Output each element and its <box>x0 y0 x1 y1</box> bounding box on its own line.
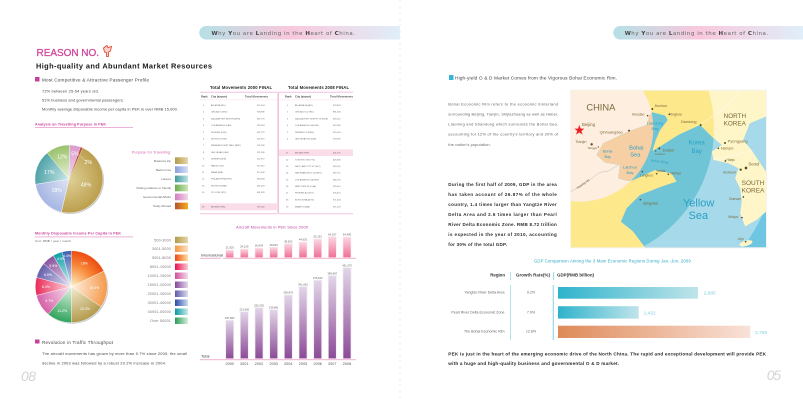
pie chart: travelling purpose: 17% <box>44 170 55 176</box>
text block: Bohai Economic Rim: the nation's population. <box>448 142 491 147</box>
section: passenger profile: 72% between 25-54 years old. <box>42 88 99 94</box>
table: total movements 2008 <box>279 85 354 214</box>
section: passenger profile: 51% business and governmental passengers. <box>42 98 124 102</box>
table: total movements 2000: 517,440 <box>257 172 265 174</box>
table: total movements 2008: LOS ANGELES CA (LAX) <box>295 124 319 127</box>
table: total movements 2000: 481,628 <box>257 192 265 194</box>
map: Bohai economic rim: CHINA <box>586 102 616 112</box>
table: total movements 2008: BOSTON MA (BOS) <box>295 198 314 201</box>
bar chart: total movements: 187,682 <box>225 316 235 320</box>
table: total movements 2008: SAN FRANCISCO CA (SFO) <box>295 172 322 175</box>
bar chart: total movements: 236,891 <box>269 305 279 309</box>
legend: travelling purpose: Governmental Affairs <box>143 195 171 199</box>
bar chart: total movements: 2008 <box>343 362 351 366</box>
map: Bohai economic rim: Seoul <box>748 161 759 166</box>
bar chart: international movements <box>200 232 356 259</box>
chart heading: disposable income: Monthly Disposable Income Per Capita in PEK <box>35 232 121 236</box>
table chart: GDP comparison: 9.2% <box>527 290 536 294</box>
chart title: GDP comparison: GDP Comparison Among the 3 Main Economic Regions During Jan.-Jun. 2009 <box>534 258 691 263</box>
table chart: GDP comparison: 1,422 <box>644 310 656 316</box>
table: total movements 2000: ST LOUIS (STL) <box>211 192 227 194</box>
bar chart: total movements: 399,987 <box>327 271 338 275</box>
table: total movements 2008: 29 <box>286 206 289 208</box>
text block: GDP statement: is expected in the year of 2010, accounting <box>448 232 557 237</box>
text block: Bohai Economic Rim: Liaoning and Shandong which surrounds the Bohai Sea, <box>448 122 558 127</box>
table: total movements 2008: DALLAS/FORT WORTH TX (DFW) <box>295 117 328 120</box>
chart title: aircraft movements: Aircraft Movements in PEK Since 2000 <box>236 224 309 230</box>
table: total movements 2000: BEIJING (PEK) <box>211 206 226 208</box>
table: total movements 2000: 3 <box>203 118 205 120</box>
table: total movements 2000: 908,989 <box>257 112 265 114</box>
title: reason number: REASON NO. <box>36 48 99 59</box>
bar chart: total movements: 2005 <box>299 362 307 366</box>
pie chart: disposable income: 9.7% <box>45 299 53 303</box>
bar chart: international movements: 28,033 <box>270 243 278 247</box>
table: total movements 2000: 11 <box>202 172 205 174</box>
table: total movements 2008: 22 <box>286 160 289 162</box>
table: total movements 2000: 98 <box>202 206 205 208</box>
pie chart: travelling purpose: 18% <box>52 188 62 194</box>
table: total movements 2000: PARIS (CDG) <box>211 164 224 167</box>
legend: travelling purpose: Purpose for Travelling: <box>132 150 171 154</box>
section heading: O & D market: High-yield O & D Market Comes from the Vigorous Bohai Economic Rim. <box>455 76 617 82</box>
page divider <box>399 0 401 400</box>
map: Bohai economic rim: Beijing <box>582 122 596 127</box>
table chart: GDP comparison: Growth Rate(%) <box>516 272 551 277</box>
table: total movements 2008: TORONTO ON (YYZ) <box>295 160 315 162</box>
table: total movements 2008: 2 <box>287 112 289 114</box>
map: Bohai economic rim: Bay <box>692 149 702 155</box>
table: total movements 2008: Total Movements <box>330 94 354 98</box>
map: Bohai economic rim: Bay <box>627 170 633 175</box>
pie chart: disposable income: 8.4% <box>42 285 50 289</box>
table chart: GDP comparison: GDP(RMB billion) <box>557 272 595 277</box>
text block: PEK conclusion: with a huge and high-quality business and governmental O & D market. <box>447 361 619 366</box>
text block: GDP statement <box>448 182 557 247</box>
table: total movements 2000: 522,972 <box>257 159 265 161</box>
section: passenger profile: Monthly average disposable income per capita in PEK is over RMB 15,000. <box>42 106 178 112</box>
bar chart: total movements: 256,235 <box>254 303 264 307</box>
bar chart: total movements: 431,670 <box>342 263 352 267</box>
table: total movements 2000: PHILADELPHIA (PHL) <box>211 178 232 181</box>
map: Bohai economic rim: Dandong <box>681 120 697 124</box>
text block: Bohai Economic Rim: Bohai Economic Rim refers to the economic hinterland <box>448 102 558 107</box>
pie chart: travelling purpose: 2% <box>85 160 92 166</box>
map: Bohai economic rim: Korea <box>689 141 705 147</box>
table: total movements 2008: 656,310 <box>333 118 341 120</box>
bar chart: international movements: 44,620 <box>299 238 308 242</box>
table: total movements 2008: 622,506 <box>333 125 341 127</box>
text block: Bohai Economic Rim: surrounding Beijing, Tianjin, Shijiazhuang as well as Hebei, <box>448 112 558 116</box>
text block: GDP statement: country, 1.4 times larger than Yangtze River <box>448 202 557 207</box>
table: total movements 2000: 12 <box>202 179 205 181</box>
map: Bohai economic rim: Bay <box>605 155 611 159</box>
table: total movements 2008: LAS VEGAS NV (LAS) <box>295 138 316 140</box>
table: total movements 2000: MINNEAPOLIS/ST PAUL (MSP) <box>211 144 241 147</box>
map: Bohai economic rim: SOUTH <box>742 180 765 187</box>
pie chart: travelling purpose <box>35 145 104 214</box>
table: total movements 2008: ATLANTA GA (ATL) <box>295 104 313 107</box>
map: Bohai economic rim: KOREA <box>742 188 765 195</box>
table: total movements 2000: LOS ANGELES (LAX) <box>211 124 232 127</box>
table: total movements 2000: 13 <box>202 185 205 187</box>
table: total movements 2008: 376,414 <box>333 186 341 188</box>
table: total movements 2000: Total Movements <box>245 94 268 98</box>
legend: disposable income: 3001-5000 <box>152 247 171 251</box>
text block: GDP statement: for 30% of the total GDP. <box>448 242 507 247</box>
table: total movements 2008: 578,949 <box>333 138 341 140</box>
header band: left page <box>199 26 400 40</box>
table chart: GDP comparison: 12.8% <box>526 330 537 334</box>
text block: GDP statement: Delta Area and 2.6 times larger than Pearl <box>448 212 557 217</box>
legend: disposable income: Over 50001 <box>150 319 171 323</box>
table: total movements 2000: MIAMI (MIA) <box>211 171 223 174</box>
table chart: GDP comparison: Pearl River Delta Economic Zone <box>451 310 504 314</box>
legend: travelling purpose: Business trip <box>154 159 171 163</box>
table: total movements 2000: 187,682 <box>257 206 265 208</box>
map: Bohai economic rim: KOREA <box>724 121 747 128</box>
map: Bohai economic rim <box>570 90 767 248</box>
bar chart: total movements: 2003 <box>269 362 278 366</box>
table: total movements 2008: 428,586 <box>333 160 341 162</box>
table: total movements 2008: 369,501 <box>333 166 341 168</box>
table: total movements 2000 <box>200 85 279 214</box>
legend: disposable income: 30001-40000 <box>148 301 171 305</box>
map: Bohai economic rim: Tanggu <box>587 146 597 150</box>
section: passenger profile: Most Competitive & Attractive Passenger Profile <box>42 78 149 82</box>
map: Bohai economic rim: Longkou <box>640 174 653 178</box>
map: Bohai economic rim: Qingdao <box>643 201 659 206</box>
map: Bohai economic rim: Sea <box>689 210 709 222</box>
title: reason number <box>36 46 112 59</box>
map: Bohai economic rim: Bohai <box>629 145 644 151</box>
bar chart: total movements: 2004 <box>284 362 293 366</box>
table: total movements 2008: 387,710 <box>333 173 341 175</box>
table: total movements 2008: City (airport) <box>295 94 311 98</box>
table: total movements 2008: CHICAGO IL (ORD) <box>295 111 314 114</box>
map: Bohai economic rim: Huludao <box>632 112 645 116</box>
table: total movements 2000: 637,779 <box>257 132 265 134</box>
table: total movements 2000: 10 <box>202 165 205 167</box>
table: total movements 2000: DENVER (DEN) <box>211 159 226 161</box>
legend: disposable income: 5001-8000 <box>152 256 171 260</box>
table: total movements 2000: CHICAGO (ORD) <box>211 111 228 114</box>
pie chart: disposable income: 5.5% <box>49 264 57 268</box>
map: Bohai economic rim: Bohai <box>603 149 613 153</box>
table: total movements 2000: 915,454 <box>257 105 265 107</box>
pie chart: disposable income: 18% <box>81 262 88 266</box>
header band: right page: Why You are Landing in the Heart of China. <box>625 31 768 37</box>
table: total movements 2000: 783,433 <box>257 125 265 127</box>
bar chart: total movements: 2006 <box>313 362 322 366</box>
table: total movements 2008: 24 <box>286 173 289 175</box>
table chart: GDP comparison <box>451 272 767 340</box>
map: Bohai economic rim: Haeju <box>726 158 735 162</box>
table: total movements 2000: 4 <box>203 125 205 127</box>
table chart: GDP comparison: Yangtze River Delta Area <box>464 290 504 294</box>
table: total movements 2000: HOUSTON (IAH) <box>211 184 227 187</box>
chart heading: travelling purpose: Analysis on Travelling Purpose in PEK <box>35 122 106 126</box>
chart heading: disposable income: Unit: RMB / year / month <box>35 239 71 243</box>
bar chart: international movements: 21,005 <box>226 246 234 250</box>
pie chart: disposable income <box>35 251 108 324</box>
bar chart: international movements: 26,934 <box>255 244 264 248</box>
table: total movements 2000: 9 <box>203 159 205 161</box>
text block: PEK conclusion <box>447 351 767 366</box>
table: total movements 2008: SALT LAKE CITY UT (SLC) <box>295 165 321 168</box>
map: Bohai economic rim: Dalian <box>663 147 674 152</box>
table: total movements 2000: 1 <box>203 105 205 107</box>
text block: GDP statement: River Delta Economic Zone. RMB 8.72 trillion <box>448 222 557 227</box>
table: total movements 2000: PHOENIX (PHX) <box>211 132 227 134</box>
table: total movements 2008: 431,670 <box>333 152 341 154</box>
table: total movements 2000: Rank <box>201 94 208 98</box>
pie chart: disposable income: 4.4% <box>63 254 71 258</box>
table: total movements 2008: Total Movements 2008 FINAL <box>288 85 349 90</box>
table: total movements 2000: 555,375 <box>257 138 265 140</box>
table: total movements 2008: 26 <box>286 186 289 188</box>
table chart: GDP comparison: 7.0% <box>527 310 536 314</box>
bar chart: total movements <box>200 263 356 366</box>
map: Bohai economic rim: Yingkou <box>669 112 682 116</box>
table: total movements 2008: DENVER CO (DEN) <box>295 132 314 134</box>
map: Bohai economic rim: Bohai Strait <box>651 158 669 165</box>
map: Bohai economic rim: Incheon <box>723 170 736 174</box>
pie chart: travelling purpose: 5% <box>71 152 79 158</box>
map: Bohai economic rim: Tianjin <box>575 140 586 144</box>
table: total movements 2008: 5 <box>287 132 289 134</box>
table: total movements 2000: 14 <box>202 192 205 194</box>
legend: disposable income: 20001-30000 <box>148 292 171 296</box>
section: passenger profile <box>35 77 178 112</box>
bar chart: international movements: 64,406 <box>343 233 352 237</box>
legend: disposable income: 40001-50000 <box>148 310 171 314</box>
page number: 08: 08 <box>21 368 36 384</box>
table: total movements 2000: 484,338 <box>257 179 265 181</box>
text block: Bohai Economic Rim: accounting for 12% of the country's territory and 20% of <box>448 132 559 137</box>
pie chart: disposable income: 4.9% <box>57 257 65 261</box>
bar chart: total movements: 300,876 <box>283 291 294 295</box>
chart heading: travelling purpose <box>35 122 133 128</box>
map: Bohai economic rim: Lushun <box>655 152 665 156</box>
map: Bohai economic rim: Laizhou <box>623 164 637 169</box>
table: total movements 2000: 6 <box>203 138 205 140</box>
table: total movements 2008: Rank <box>285 94 292 98</box>
bar chart: total movements: 376,643 <box>313 276 323 280</box>
table chart: GDP comparison: The Bohai Economic Rim <box>464 330 505 334</box>
table: total movements 2000: 5 <box>203 132 205 134</box>
pie chart: disposable income: 15.3% <box>80 307 90 311</box>
map: Bohai economic rim: Namp'o <box>721 146 733 150</box>
bar chart: total movements: 221,650 <box>239 307 250 311</box>
pie chart: disposable income: 11.2% <box>57 309 67 313</box>
table: total movements 2008: 371,518 <box>333 206 341 208</box>
legend: disposable income <box>148 237 188 324</box>
map: Bohai economic rim: Bay <box>652 126 658 131</box>
table: total movements 2000: 482,578 <box>257 185 265 187</box>
bar chart: total movements: 2007 <box>328 362 337 366</box>
table: total movements 2000: 517,657 <box>257 165 265 167</box>
table: total movements 2008: 25 <box>286 179 289 181</box>
page number: 05: 05 <box>767 367 781 383</box>
map: Bohai economic rim: Qinhuangdao <box>600 131 623 135</box>
section: traffic throughput <box>35 340 187 366</box>
table chart: GDP comparison: 3,755 <box>755 330 767 336</box>
bar chart: international movements: International <box>201 252 223 258</box>
table: total movements 2000: 2 <box>203 112 205 114</box>
table: total movements 2000: 8 <box>203 152 205 154</box>
pie chart: travelling purpose: 12% <box>57 154 68 160</box>
table: total movements 2008: 28 <box>286 199 289 201</box>
table: total movements 2008: 619,503 <box>333 132 341 134</box>
table: total movements 2008: 23 <box>286 166 289 168</box>
section: traffic throughput: The aircraft movements has grown by more than 9.7% since 2000; the small <box>42 351 187 356</box>
legend: travelling purpose: Back home <box>156 168 171 172</box>
text block: Bohai Economic Rim <box>448 102 559 147</box>
legend: travelling purpose <box>132 150 188 209</box>
map: Bohai economic rim: Pyongyang <box>728 138 748 143</box>
table: total movements 2008: 376,216 <box>333 193 341 195</box>
legend: travelling purpose: Study Abroad <box>153 204 171 208</box>
table chart: GDP comparison: Region <box>490 272 505 277</box>
text block: GDP statement: During the first half of 2009, GDP in the area <box>448 182 557 187</box>
table: total movements 2008: NEW YORK NY (LGA) <box>295 185 316 188</box>
bar chart: international movements: 64,027 <box>328 232 337 236</box>
table: total movements 2000: ATLANTA (ATL) <box>211 104 226 107</box>
bar chart: total movements: 341,681 <box>298 282 308 286</box>
map: Bohai economic rim: Sea <box>630 153 641 159</box>
table: total movements 2008: 386,795 <box>333 179 341 181</box>
map: Bohai economic rim: Weihai <box>670 172 681 176</box>
pie chart: disposable income: 16.5% <box>89 286 99 290</box>
table: total movements 2000: 837,779 <box>257 118 265 120</box>
legend: travelling purpose: Visiting relatives or friends <box>136 186 171 190</box>
table: total movements 2008: 21 <box>286 152 289 154</box>
bar chart: international movements: 55,133 <box>314 235 322 239</box>
map: Bohai economic rim: Mokpo <box>728 215 738 219</box>
table: total movements 2000: 522,196 <box>257 145 265 147</box>
legend: disposable income: 10001-15000 <box>148 274 171 278</box>
chart heading: disposable income <box>35 232 133 243</box>
table: total movements 2000: 521,300 <box>257 152 265 154</box>
table: total movements 2000: DALLAS/FORT WORTH (DFW) <box>211 117 241 120</box>
map: Bohai economic rim: NORTH <box>724 113 746 120</box>
bar chart: total movements: 2000 <box>225 362 234 366</box>
section: traffic throughput: decline in 2003 was followed by a robust 29.2% increase in 2004. <box>42 360 166 366</box>
map: Bohai economic rim: Jeju <box>738 237 744 241</box>
table chart: GDP comparison: 2,685 <box>704 291 716 297</box>
table: total movements 2000: 7 <box>203 145 205 147</box>
table: total movements 2008: 881,566 <box>333 112 341 114</box>
legend: disposable income: 500-3000 <box>154 238 171 242</box>
table: total movements 2000: LAS VEGAS (LAS) <box>211 151 229 154</box>
legend: travelling purpose: Leisure <box>161 177 171 181</box>
pie chart: disposable income: 6.9% <box>44 273 52 277</box>
map: Bohai economic rim: Yantai <box>656 169 665 173</box>
section: traffic throughput: Revolution in Traffic Throughput <box>42 340 114 345</box>
header band: right page <box>613 26 803 40</box>
table: total movements 2008: 6 <box>287 138 289 140</box>
legend: disposable income: 8001-10000 <box>150 265 171 269</box>
bar chart: international movements: 24,109 <box>240 245 249 249</box>
table: total movements 2008: 27 <box>286 193 289 195</box>
subtitle: High-quality and Abundant Market Resources <box>36 62 212 70</box>
table: total movements 2008: BEIJING (PEK) <box>295 152 310 154</box>
table: total movements 2008: 3 <box>287 118 289 120</box>
map: Bohai economic rim: Huang He <box>576 178 591 190</box>
table: total movements 2000: Total Movements 2000 FINAL <box>210 85 272 90</box>
bar chart: total movements: 2002 <box>255 362 263 366</box>
legend: disposable income: 15001-20000 <box>148 283 171 287</box>
pie chart: travelling purpose: 48% <box>81 182 92 188</box>
bar chart: international movements: 38,503 <box>284 239 293 243</box>
map: Bohai economic rim: Liaodong <box>647 120 663 125</box>
table: total movements 2008: MIAMI FL (MIA) <box>295 206 310 208</box>
table: total movements 2008: 4 <box>287 125 289 127</box>
table: total movements 2000: City (airport) <box>211 94 227 98</box>
table: total movements 2008: 371,604 <box>333 199 341 201</box>
bar chart: total movements: Total <box>201 354 210 358</box>
table: total movements 2008: 978,824 <box>333 105 341 107</box>
table: total movements 2008: LOS ANGELES CA (VNY) <box>295 178 319 181</box>
bar chart: total movements: 2001 <box>240 362 249 366</box>
table: total movements 2008: 1 <box>287 105 289 107</box>
header band: left page: Why You are Landing in the Heart of China. <box>212 31 355 37</box>
map: Bohai economic rim: Yellow <box>683 197 714 209</box>
map: Bohai economic rim: Gunsan <box>729 197 741 201</box>
text block: GDP statement: has taken account of 26.87% of the whole <box>448 192 557 197</box>
table: total movements 2000: DETROIT (DTW) <box>211 138 227 140</box>
map: Bohai economic rim: Jinzhou <box>654 104 667 108</box>
table: total movements 2008: PHOENIX AZ (DVT) <box>295 192 314 195</box>
text block: PEK conclusion: PEK is just in the heart of the emerging economic drive of the North China. The rapid and exceptional development will provide PEK <box>448 351 767 356</box>
